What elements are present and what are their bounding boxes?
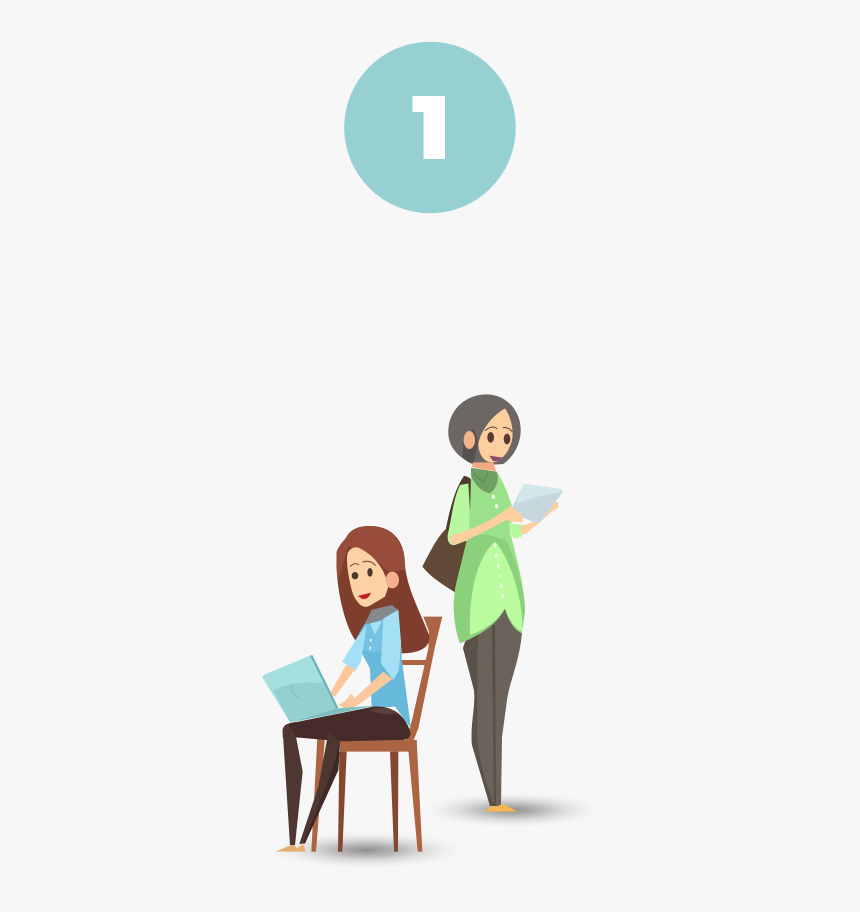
long hair [336,526,429,653]
tablet [510,484,563,523]
chair back [401,617,442,748]
number 1: 1 [406,83,452,177]
arms and hand [330,666,392,710]
blue shirt [342,605,411,728]
standing woman [422,394,563,812]
dress [448,472,527,643]
legs and shoes [276,707,411,852]
shoulder bag [422,476,474,592]
number badge [344,42,516,213]
seated woman [262,526,429,852]
face [347,547,399,623]
laptop [262,655,375,722]
hand on tablet [505,506,523,522]
trousers and shoes [463,600,522,812]
far forearm behind tablet [520,502,558,534]
ground shadow: standing woman [416,791,608,829]
ground shadow: seated woman [261,830,473,870]
head and hair [448,394,521,493]
chair [311,737,422,852]
arm holding tablet [450,506,523,544]
